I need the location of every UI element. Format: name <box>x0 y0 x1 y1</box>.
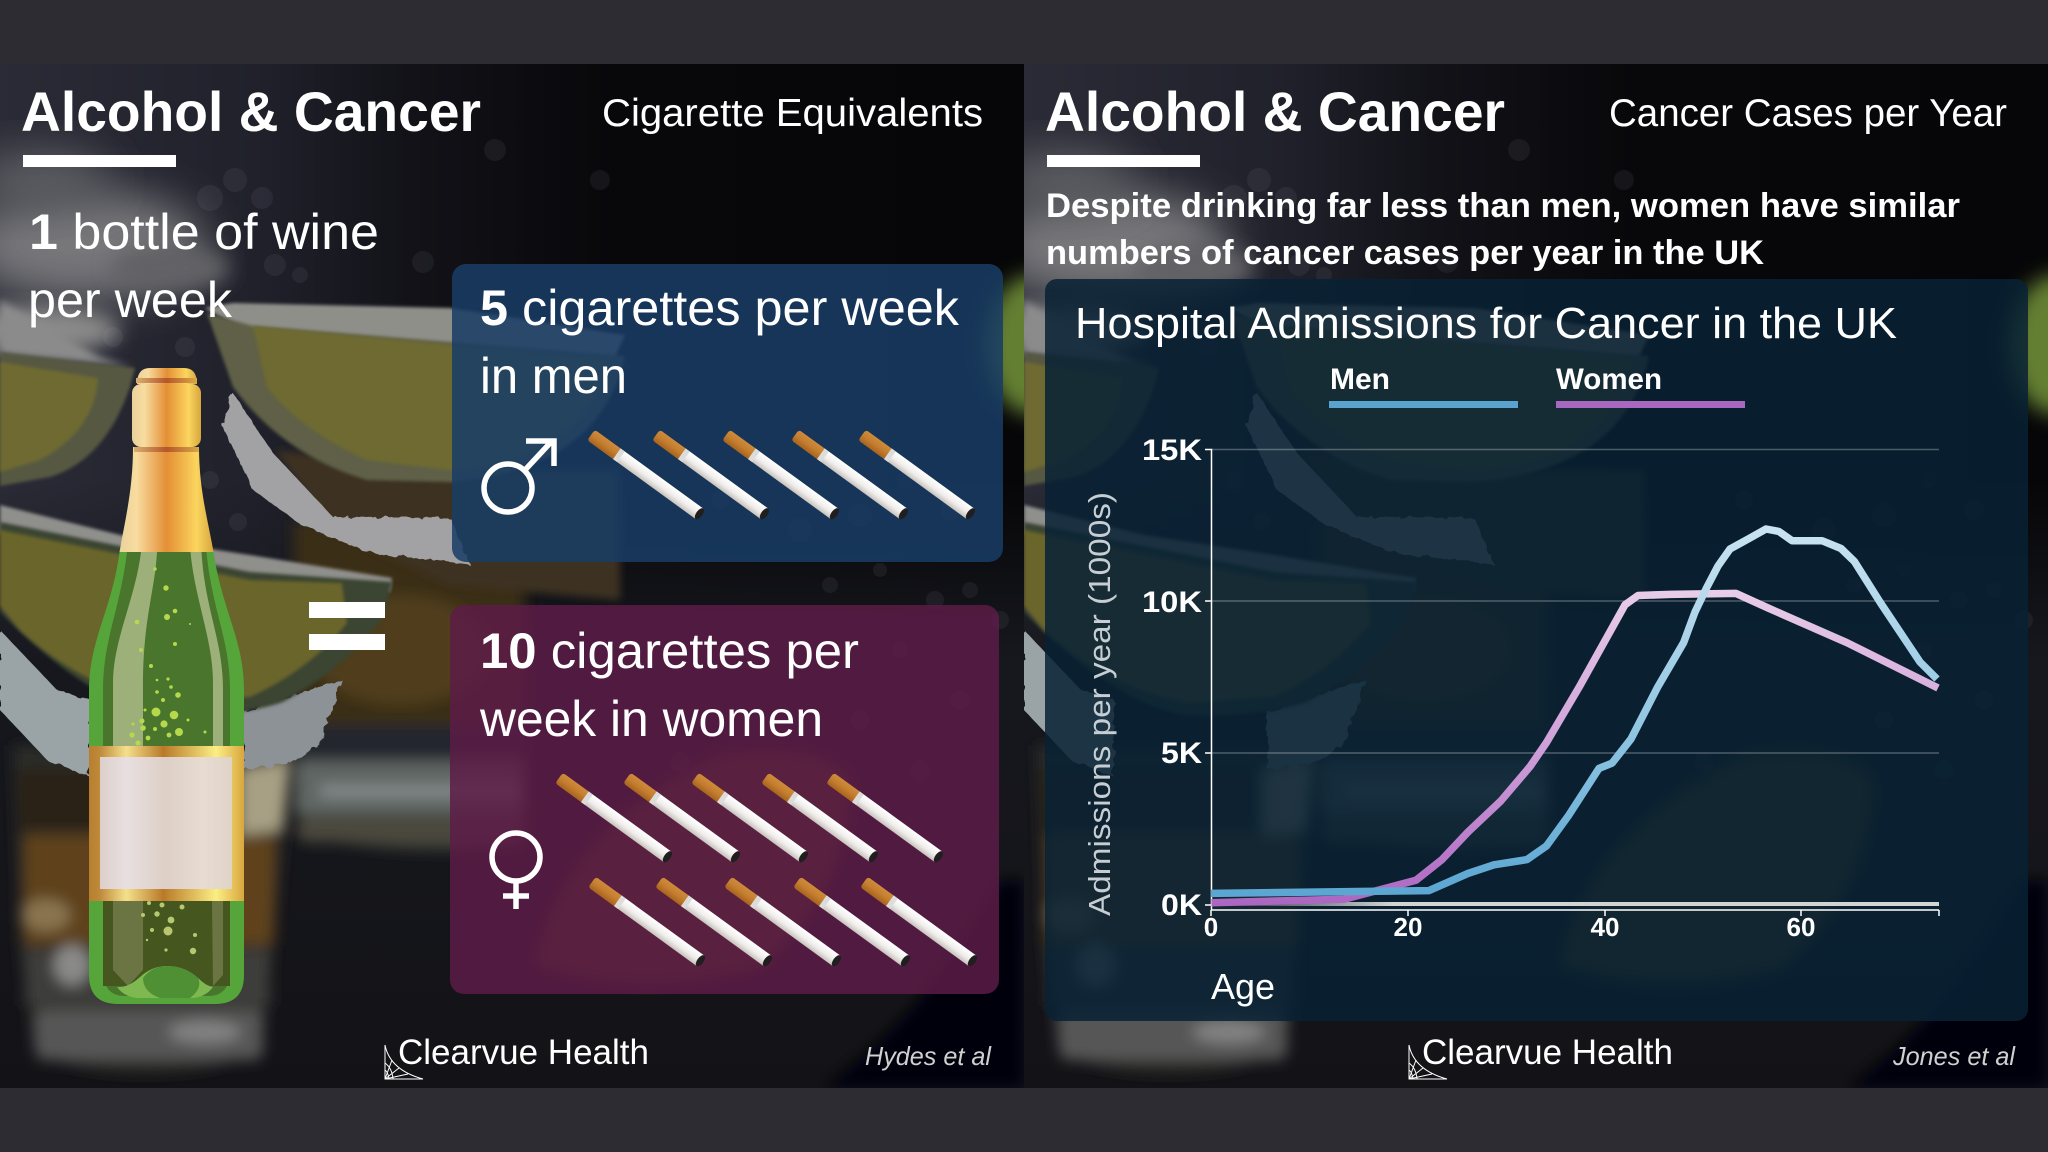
y axis labels: 15K <box>1142 434 1202 467</box>
top bar <box>0 0 2048 64</box>
brand logo right <box>1409 1045 1447 1079</box>
title right: Alcohol & Cancer <box>1045 80 1505 143</box>
five cigarettes <box>587 430 977 521</box>
brand name left: Clearvue Health <box>398 1033 649 1072</box>
ten cigarettes <box>555 773 979 968</box>
subtitle right: Cancer Cases per Year <box>1609 92 2007 135</box>
y axis labels <box>1142 434 1202 922</box>
wine statement <box>28 204 379 328</box>
y axis labels: 5K <box>1161 737 1202 770</box>
women heading: week in women <box>479 691 823 747</box>
x axis labels <box>1204 912 1815 942</box>
y axis title: Admissions per year (1000s) <box>1082 492 1117 916</box>
panel: women <box>450 605 999 994</box>
chart panel <box>1045 279 2028 1021</box>
x axis labels: 40 <box>1591 912 1619 942</box>
x axis title: Age <box>1211 966 1275 1007</box>
men heading <box>480 280 960 404</box>
wine statement: 1 bottle of wine <box>29 204 379 260</box>
women heading <box>479 623 859 747</box>
title underline left <box>23 155 176 167</box>
men heading: in men <box>480 348 627 404</box>
citation left: Hydes et al <box>865 1041 992 1071</box>
background photo: left <box>0 64 1085 1088</box>
y axis labels: 0K <box>1161 889 1202 922</box>
icon: wine bottle <box>89 368 244 1004</box>
legend: women <box>1556 363 1745 408</box>
legend: women: Women <box>1556 363 1662 396</box>
panel: men <box>452 264 1003 562</box>
y axis labels: 10K <box>1142 586 1202 619</box>
x axis labels: 60 <box>1787 912 1815 942</box>
series: women <box>1211 593 1938 903</box>
x axis labels: 0 <box>1204 912 1218 942</box>
x axis labels: 20 <box>1394 912 1422 942</box>
brand name right: Clearvue Health <box>1422 1033 1673 1072</box>
background photo: right <box>984 64 2048 1088</box>
chart title: Hospital Admissions for Cancer in the UK <box>1075 299 1897 348</box>
statement: Despite drinking far less than men, women have similar <box>1046 187 1960 225</box>
icon: male symbol <box>484 441 554 512</box>
women heading: 10 cigarettes per <box>480 623 859 679</box>
panel: cancer cases <box>984 64 2048 1088</box>
men heading: 5 cigarettes per week <box>480 280 960 336</box>
statement <box>1046 187 1960 272</box>
subtitle left: Cigarette Equivalents <box>602 92 983 135</box>
wine statement: per week <box>28 272 233 328</box>
equals sign <box>309 602 385 650</box>
statement: numbers of cancer cases per year in the UK <box>1046 234 1764 272</box>
legend: men: Men <box>1330 363 1390 396</box>
title left: Alcohol & Cancer <box>21 80 481 143</box>
bottom bar <box>0 1088 2048 1152</box>
citation right: Jones et al <box>1892 1041 2016 1071</box>
brand logo left <box>385 1045 423 1079</box>
panel: cigarette equivalents <box>0 64 1085 1088</box>
icon: female symbol <box>492 833 540 909</box>
series: men <box>1211 529 1937 893</box>
title underline right <box>1047 155 1200 167</box>
line chart <box>1205 450 1939 916</box>
legend: men <box>1329 363 1518 408</box>
